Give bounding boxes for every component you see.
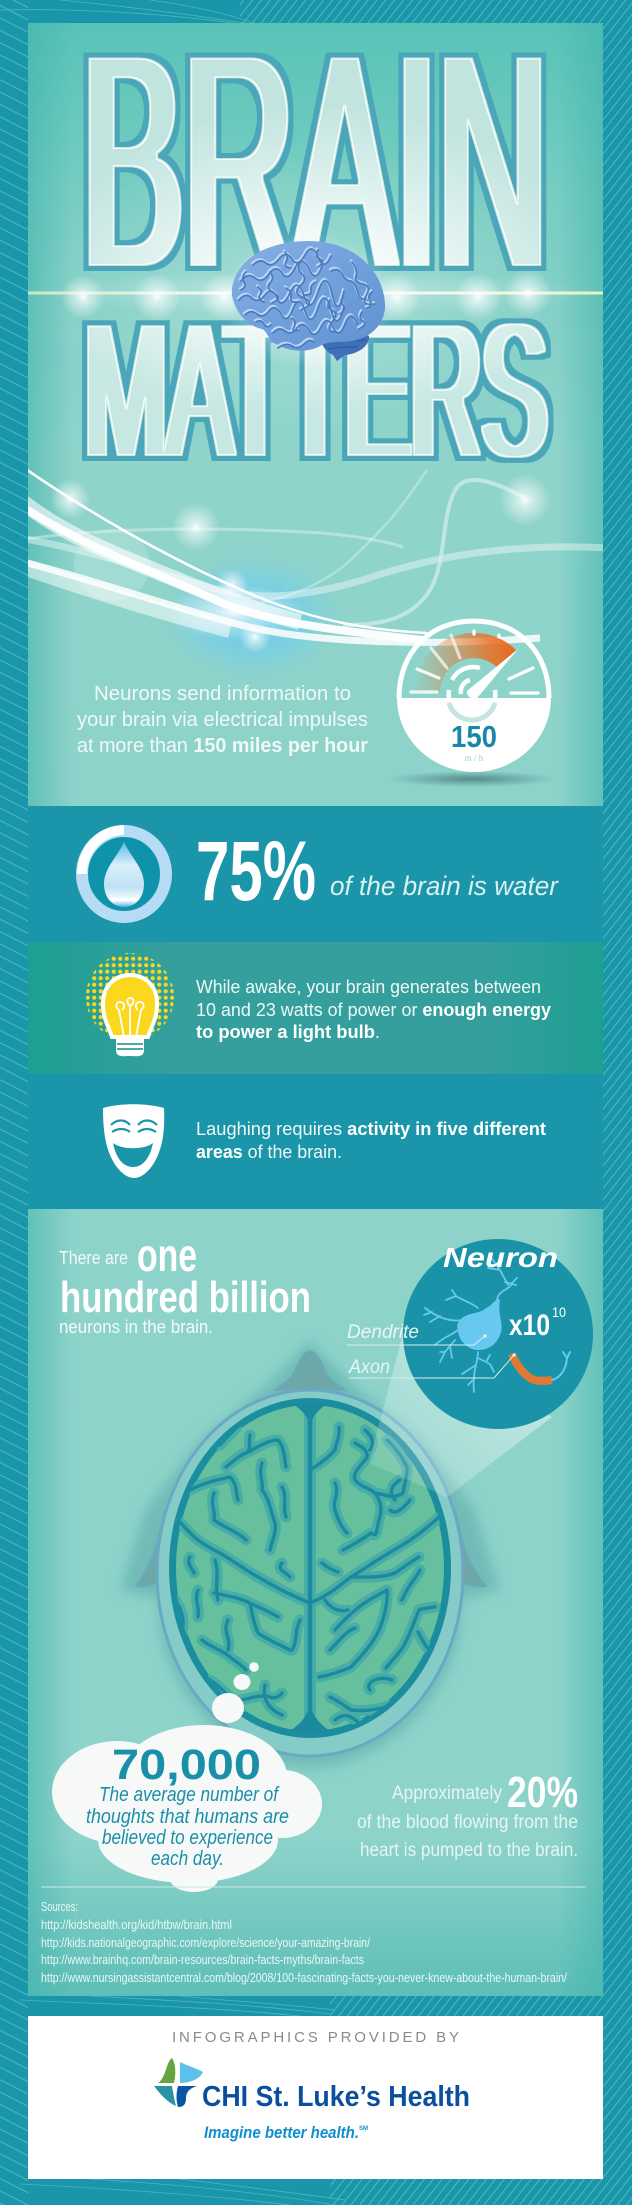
icon: CHI cross logo — [154, 2058, 203, 2107]
callout: neuron magnifier: Dendrite — [347, 1322, 419, 1343]
callout: thought cloud 70,000: thoughts that humans are — [86, 1806, 289, 1828]
text: neuron speed: Neurons send information to — [94, 683, 351, 705]
callout: thought cloud 70,000: believed to experience — [102, 1827, 273, 1849]
title: BRAIN: BRAIN — [82, 0, 548, 333]
text: laughing — [196, 1119, 546, 1162]
sources: http://www.brainhq.com/brain-resources/brain-facts-myths/brain-facts — [41, 1952, 364, 1967]
illustration: head from above — [120, 1340, 500, 1768]
light streaks — [28, 469, 603, 668]
text: watts of power: While awake, your brain generates between — [196, 977, 541, 997]
text: one hundred billion neurons: neurons in the brain. — [59, 1317, 213, 1337]
icon: speedometer 150 m/h: 150 — [451, 719, 497, 754]
icon: speedometer 150 m/h — [387, 621, 557, 787]
text: watts of power — [196, 977, 551, 1042]
icon: speedometer 150 m/h: m / h — [465, 753, 484, 763]
brain sulci — [175, 1400, 439, 1737]
callout: thought cloud 70,000: each day. — [151, 1848, 224, 1870]
panel: provider logo: CHI St. Luke’s Health — [202, 2081, 470, 2113]
text: laughing: Laughing requires activity in five different — [196, 1119, 546, 1139]
stat: 20 percent of the blood: of the blood flowing from the — [357, 1812, 578, 1833]
sources: http://kids.nationalgeographic.com/explore/science/your-amazing-brain/ — [41, 1935, 370, 1950]
icon: laughing mask — [103, 1104, 164, 1178]
neuron cell — [424, 1256, 570, 1392]
panel: title and neuron speed — [28, 23, 603, 806]
callout: thought cloud 70,000: The average number of — [99, 1784, 280, 1806]
icon: water drop ring — [77, 825, 166, 917]
callout: neuron magnifier: Neuron — [443, 1242, 558, 1273]
callout: thought cloud 70,000: 70,000 — [112, 1741, 261, 1789]
panel: facts band — [28, 806, 603, 1209]
panel: provider logo: SM — [359, 2126, 368, 2132]
callout: neuron magnifier: x10 — [509, 1309, 550, 1342]
panel: provider logo: Imagine better health. — [204, 2123, 359, 2142]
text: one hundred billion neurons: There are — [59, 1248, 128, 1268]
callout: neuron magnifier — [347, 1239, 593, 1497]
text: neuron speed: at more than 150 miles per hour — [77, 735, 368, 757]
icon: blue brain — [220, 232, 396, 368]
callout: neuron magnifier: 10 — [552, 1304, 566, 1320]
stat: 75 percent of the brain is water: 75% — [196, 824, 316, 918]
sources: http://kidshealth.org/kid/htbw/brain.html — [41, 1917, 232, 1932]
callout: thought cloud 70,000 — [52, 1662, 322, 1892]
panel: neurons and head — [28, 1209, 603, 1996]
panel: provider logo — [28, 2016, 603, 2179]
sources — [41, 1887, 586, 1985]
stat: 20 percent of the blood — [357, 1768, 578, 1861]
stat: 75 percent of the brain is water: of the brain is water — [330, 871, 559, 901]
stat: 20 percent of the blood: heart is pumped to the brain. — [360, 1840, 578, 1861]
text: watts of power: 10 and 23 watts of power or enough energy — [196, 1000, 551, 1020]
icon: light bulb — [86, 953, 174, 1056]
text: laughing: areas of the brain. — [196, 1142, 342, 1162]
text: one hundred billion neurons: one — [137, 1229, 197, 1281]
panel: provider logo: INFOGRAPHICS PROVIDED BY — [172, 2029, 459, 2046]
sources: Sources: — [41, 1899, 78, 1914]
text: watts of power: to power a light bulb. — [196, 1022, 380, 1042]
text: neuron speed: your brain via electrical impulses — [77, 709, 368, 731]
callout: neuron magnifier: Axon — [348, 1357, 390, 1378]
text: neuron speed — [77, 683, 368, 757]
light line with sparkles — [28, 269, 603, 321]
stat: 20 percent of the blood: Approximately — [392, 1783, 502, 1804]
stat: 75 percent of the brain is water — [196, 824, 559, 918]
text: one hundred billion neurons — [59, 1229, 311, 1337]
stat: 20 percent of the blood: 20% — [507, 1768, 578, 1817]
title: MATTERS: MATTERS — [85, 283, 547, 499]
text: one hundred billion neurons: hundred billion — [60, 1273, 311, 1322]
